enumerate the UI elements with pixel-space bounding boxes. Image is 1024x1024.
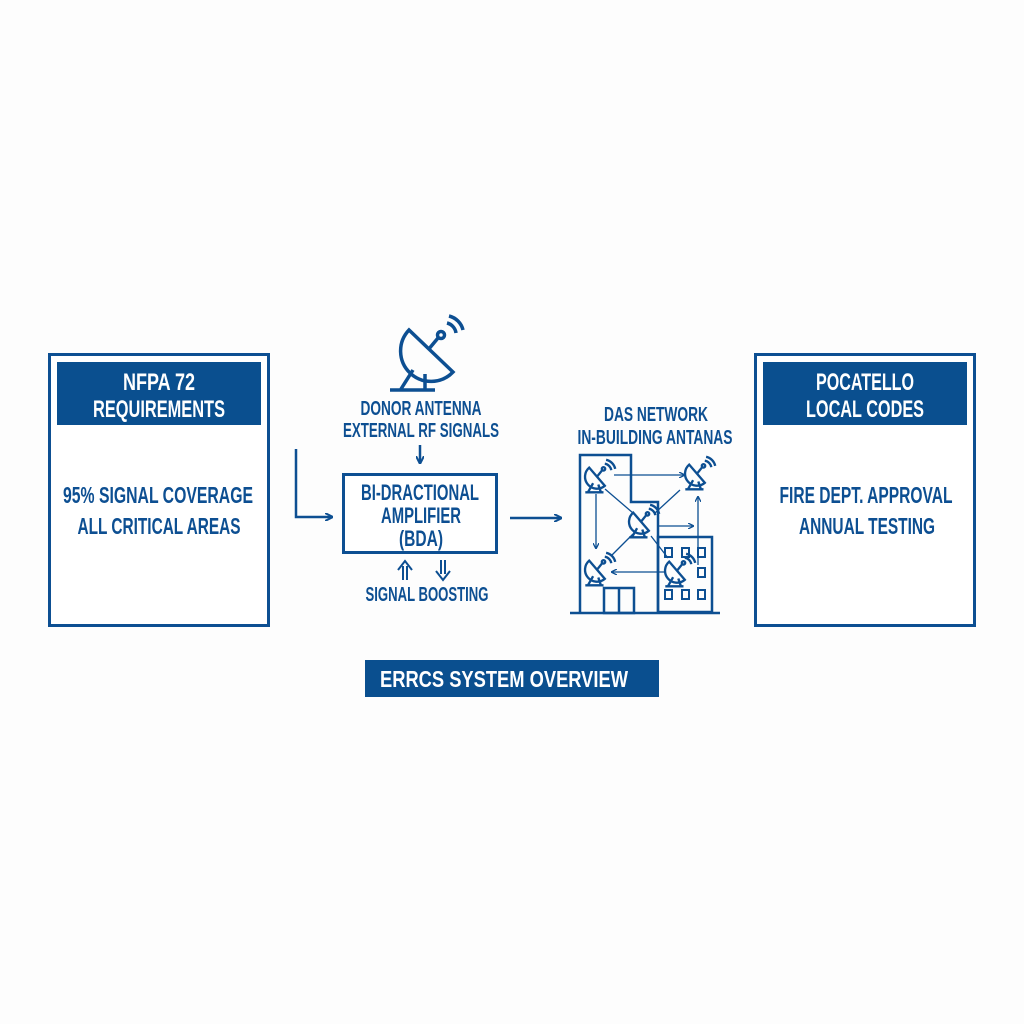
heading: Pocatello local codes — [763, 362, 967, 425]
arrow: down into BDA — [419, 445, 421, 463]
text block: coverage: 95% SIGNAL COVERAGE — [63, 482, 253, 508]
icon: donor antenna dish — [390, 316, 463, 390]
heading: Pocatello local codes: POCATELLO — [816, 369, 914, 396]
text block: signal boosting: SIGNAL BOOSTING — [366, 584, 488, 606]
box: BDA: BI-DRACTIONAL — [361, 480, 479, 505]
text block: DAS network: DAS NETWORK — [604, 404, 708, 426]
icon: up/down arrows — [398, 560, 450, 580]
text block: approvals: ANNUAL TESTING — [799, 513, 935, 539]
box: BDA: (BDA) — [399, 526, 443, 551]
box: BDA: AMPLIFIER — [381, 503, 461, 528]
arrow: elbow into BDA — [296, 449, 332, 517]
banner: ERRCS system overview: ERRCS SYSTEM OVERVIEW — [380, 666, 628, 692]
heading: NFPA 72 requirements: REQUIREMENTS — [93, 396, 225, 423]
icon: building with DAS antennas — [570, 455, 720, 613]
arrow: BDA to DAS — [510, 517, 561, 519]
text block: donor antenna: EXTERNAL RF SIGNALS — [343, 420, 499, 442]
heading: Pocatello local codes: LOCAL CODES — [806, 396, 924, 423]
box: BDA — [344, 474, 496, 552]
text block: donor antenna: DONOR ANTENNA — [360, 398, 482, 420]
text block: critical areas: ALL CRITICAL AREAS — [78, 513, 240, 539]
panel: NFPA 72 requirements — [50, 354, 268, 626]
text block: approvals — [780, 482, 952, 539]
text block: donor antenna — [343, 398, 499, 442]
text block: DAS network — [578, 404, 732, 449]
banner: ERRCS system overview — [365, 660, 659, 697]
heading: NFPA 72 requirements — [57, 362, 261, 425]
heading: NFPA 72 requirements: NFPA 72 — [123, 369, 195, 396]
text block: DAS network: IN-BUILDING ANTANAS — [578, 427, 732, 449]
panel: Pocatello local codes — [756, 354, 974, 626]
